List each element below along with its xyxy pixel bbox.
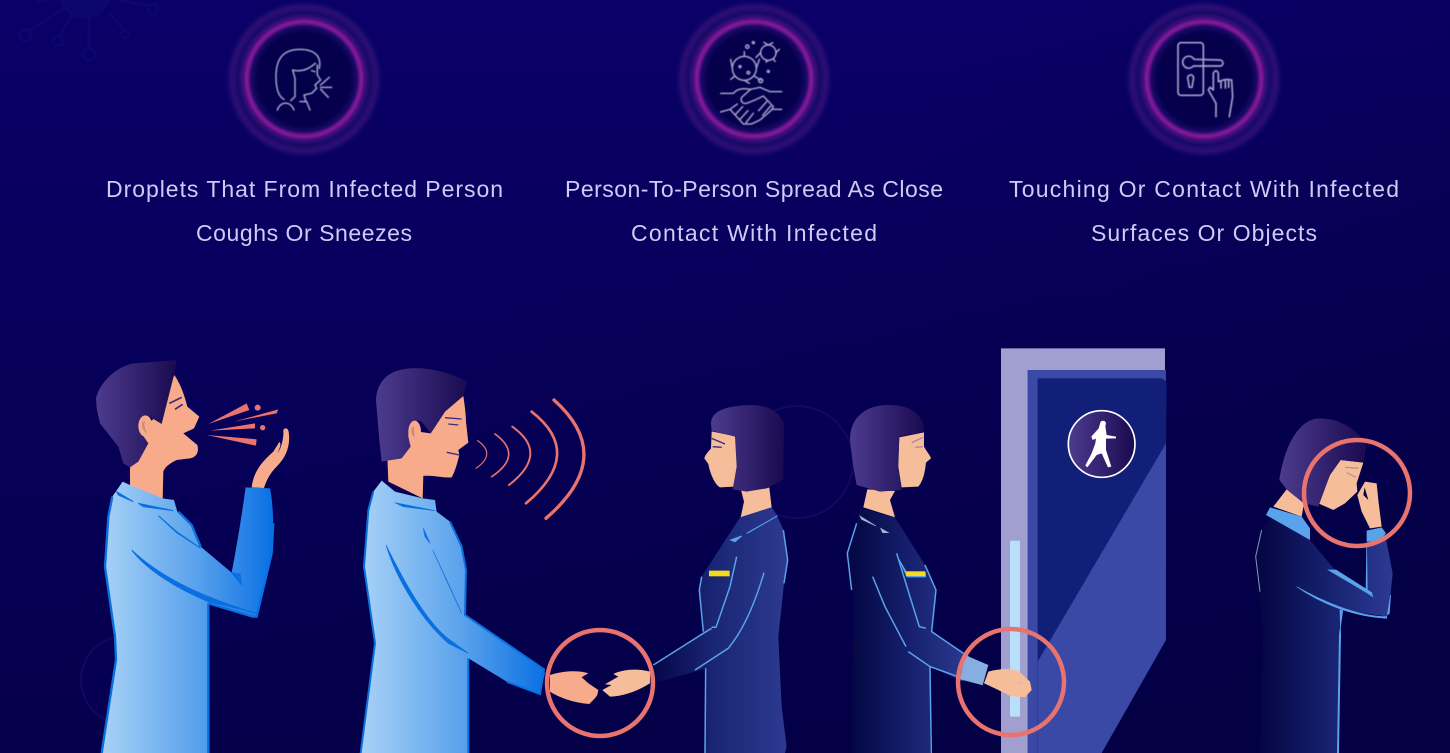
speech waves (476, 400, 584, 518)
caption: person-to-person spread (565, 176, 943, 246)
caption: touching surfaces (1009, 176, 1399, 246)
figure: woman shaking hands (653, 405, 788, 753)
icon: virus over handshake (674, 0, 834, 159)
exit sign (1068, 411, 1135, 477)
caption: person-to-person spread: Person-To-Person Spread As Close (565, 176, 943, 202)
caption: droplets (106, 176, 503, 246)
highlight circle: face touching (1304, 440, 1410, 546)
figure: man speaking, arm extended (361, 368, 598, 753)
figure: woman touching her face (1255, 418, 1393, 753)
figure: woman touching door handle (847, 405, 968, 753)
figure: man coughing into hand (96, 360, 289, 753)
droplets (207, 403, 278, 446)
icon: door handle and pointing hand (1124, 0, 1284, 159)
caption: droplets: Coughs Or Sneezes (196, 220, 412, 246)
caption: touching surfaces: Surfaces Or Objects (1091, 220, 1317, 246)
icon: person sneezing (224, 0, 384, 159)
caption: person-to-person spread: Contact With Infected (631, 220, 877, 246)
name badge (906, 571, 925, 576)
background virus motif (19, 0, 158, 60)
name badge (709, 571, 730, 576)
caption: droplets: Droplets That From Infected Person (106, 176, 503, 202)
door with handle and exit sign (960, 348, 1167, 753)
background faint circles (81, 406, 853, 724)
highlight circle: door handle (958, 629, 1064, 735)
second-person hand crossing the circle (602, 670, 650, 697)
highlight circle: handshake (547, 630, 653, 736)
caption: touching surfaces: Touching Or Contact With Infected (1009, 176, 1399, 202)
hand and cuff (960, 655, 1032, 697)
